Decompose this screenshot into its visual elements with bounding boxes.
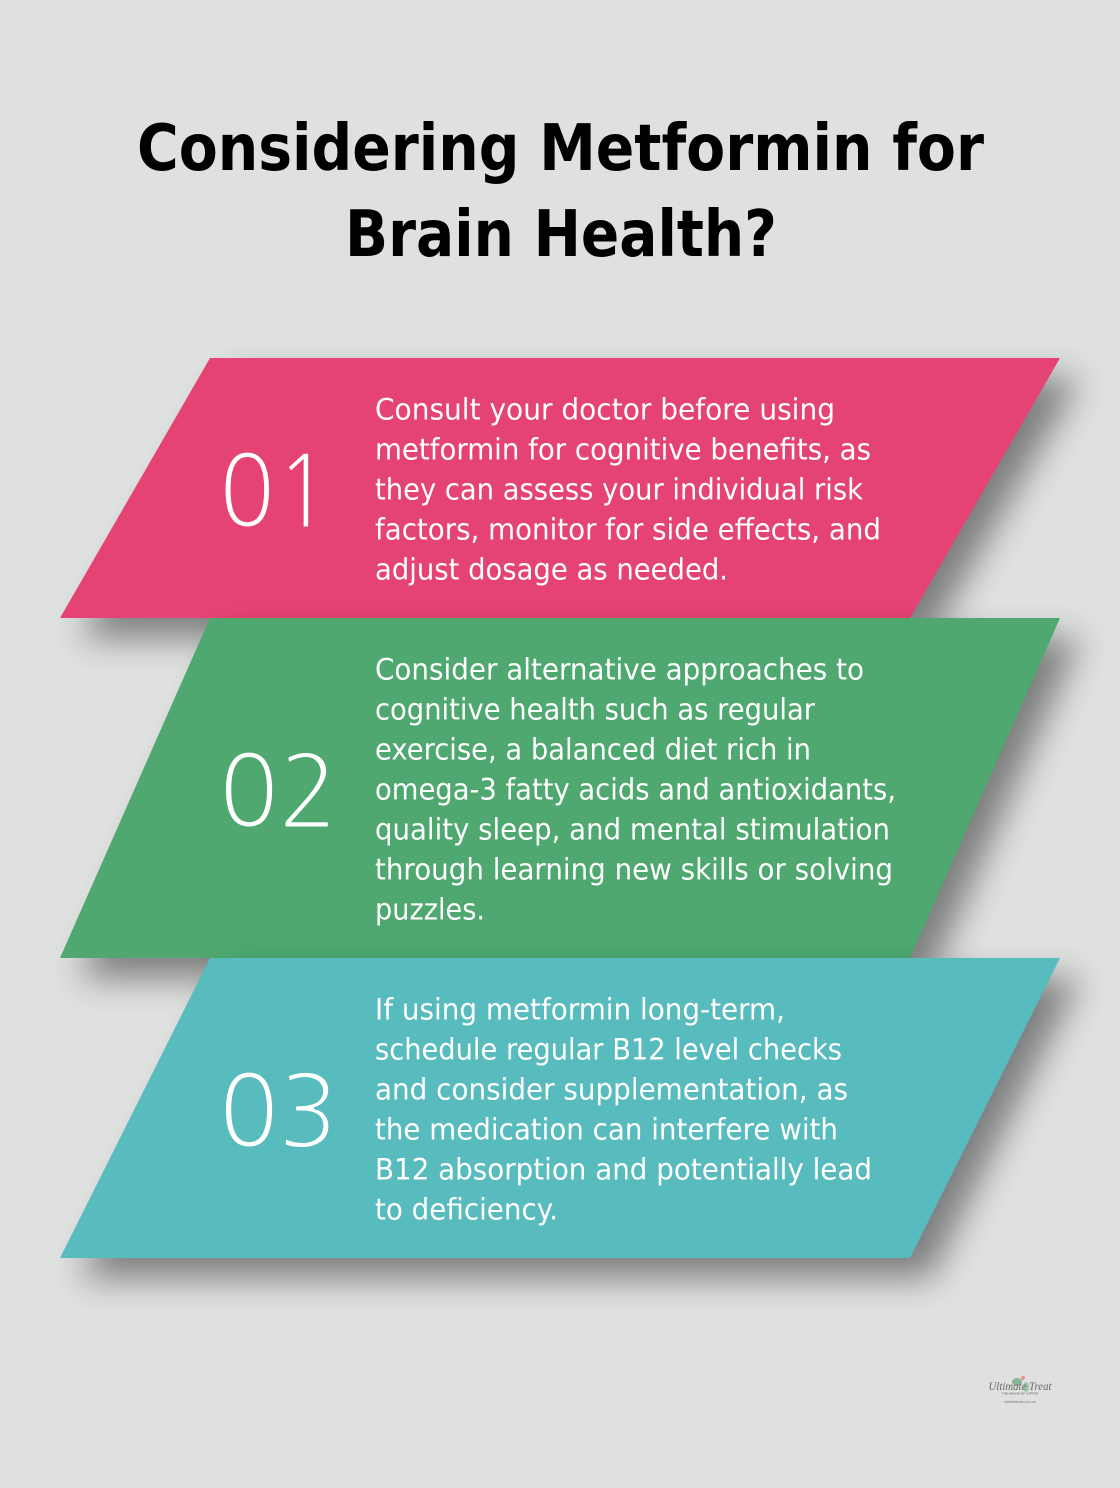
logo: Ultimate Treat bbox=[988, 1379, 1052, 1393]
step 02 text: quality sleep, and mental stimulation bbox=[375, 812, 890, 846]
panel: step 03 bbox=[60, 958, 1080, 1278]
step 01 text bbox=[375, 392, 881, 586]
panel: step 01 bbox=[60, 358, 1080, 638]
step 02 text: through learning new skills or solving bbox=[375, 852, 893, 886]
step 03 text: to deficiency. bbox=[375, 1192, 558, 1226]
step 03 text: If using metformin long-term, bbox=[375, 992, 785, 1026]
step 02 text: Consider alternative approaches to bbox=[375, 652, 864, 686]
step 02 text: exercise, a balanced diet rich in bbox=[375, 732, 811, 766]
step 01 text: metformin for cognitive benefits, as bbox=[375, 432, 871, 466]
step 03 background bbox=[60, 958, 1060, 1258]
step 03 text bbox=[375, 992, 872, 1226]
logo bbox=[988, 1376, 1052, 1404]
step 01 text: adjust dosage as needed. bbox=[375, 552, 728, 586]
step 03 text: schedule regular B12 level checks bbox=[375, 1032, 842, 1066]
step 01 text: they can assess your individual risk bbox=[375, 472, 863, 506]
step 03 number: 03 bbox=[219, 1062, 338, 1162]
step 02 number: 02 bbox=[219, 742, 338, 842]
step 01 background bbox=[60, 358, 1060, 618]
step 03 text: B12 absorption and potentially lead bbox=[375, 1152, 872, 1186]
logo: THE HEALTH OF COFFEE bbox=[1002, 1392, 1038, 1396]
title: Brain Health? bbox=[345, 198, 777, 272]
step 02 text: omega-3 fatty acids and antioxidants, bbox=[375, 772, 896, 806]
step 02 text: cognitive health such as regular bbox=[375, 692, 815, 726]
logo: ultimatetreat.com.au bbox=[1004, 1400, 1036, 1404]
step 02 text bbox=[375, 652, 896, 926]
title bbox=[137, 112, 984, 272]
step 01 number: 01 bbox=[219, 442, 331, 542]
title: Considering Metformin for bbox=[137, 112, 984, 186]
panel: step 02 bbox=[60, 618, 1080, 978]
step 03 text: the medication can interfere with bbox=[375, 1112, 838, 1146]
step 01 text: Consult your doctor before using bbox=[375, 392, 835, 426]
step 02 text: puzzles. bbox=[375, 892, 485, 926]
step 03 text: and consider supplementation, as bbox=[375, 1072, 848, 1106]
step 02 background bbox=[60, 618, 1060, 958]
step 01 text: factors, monitor for side effects, and bbox=[375, 512, 881, 546]
